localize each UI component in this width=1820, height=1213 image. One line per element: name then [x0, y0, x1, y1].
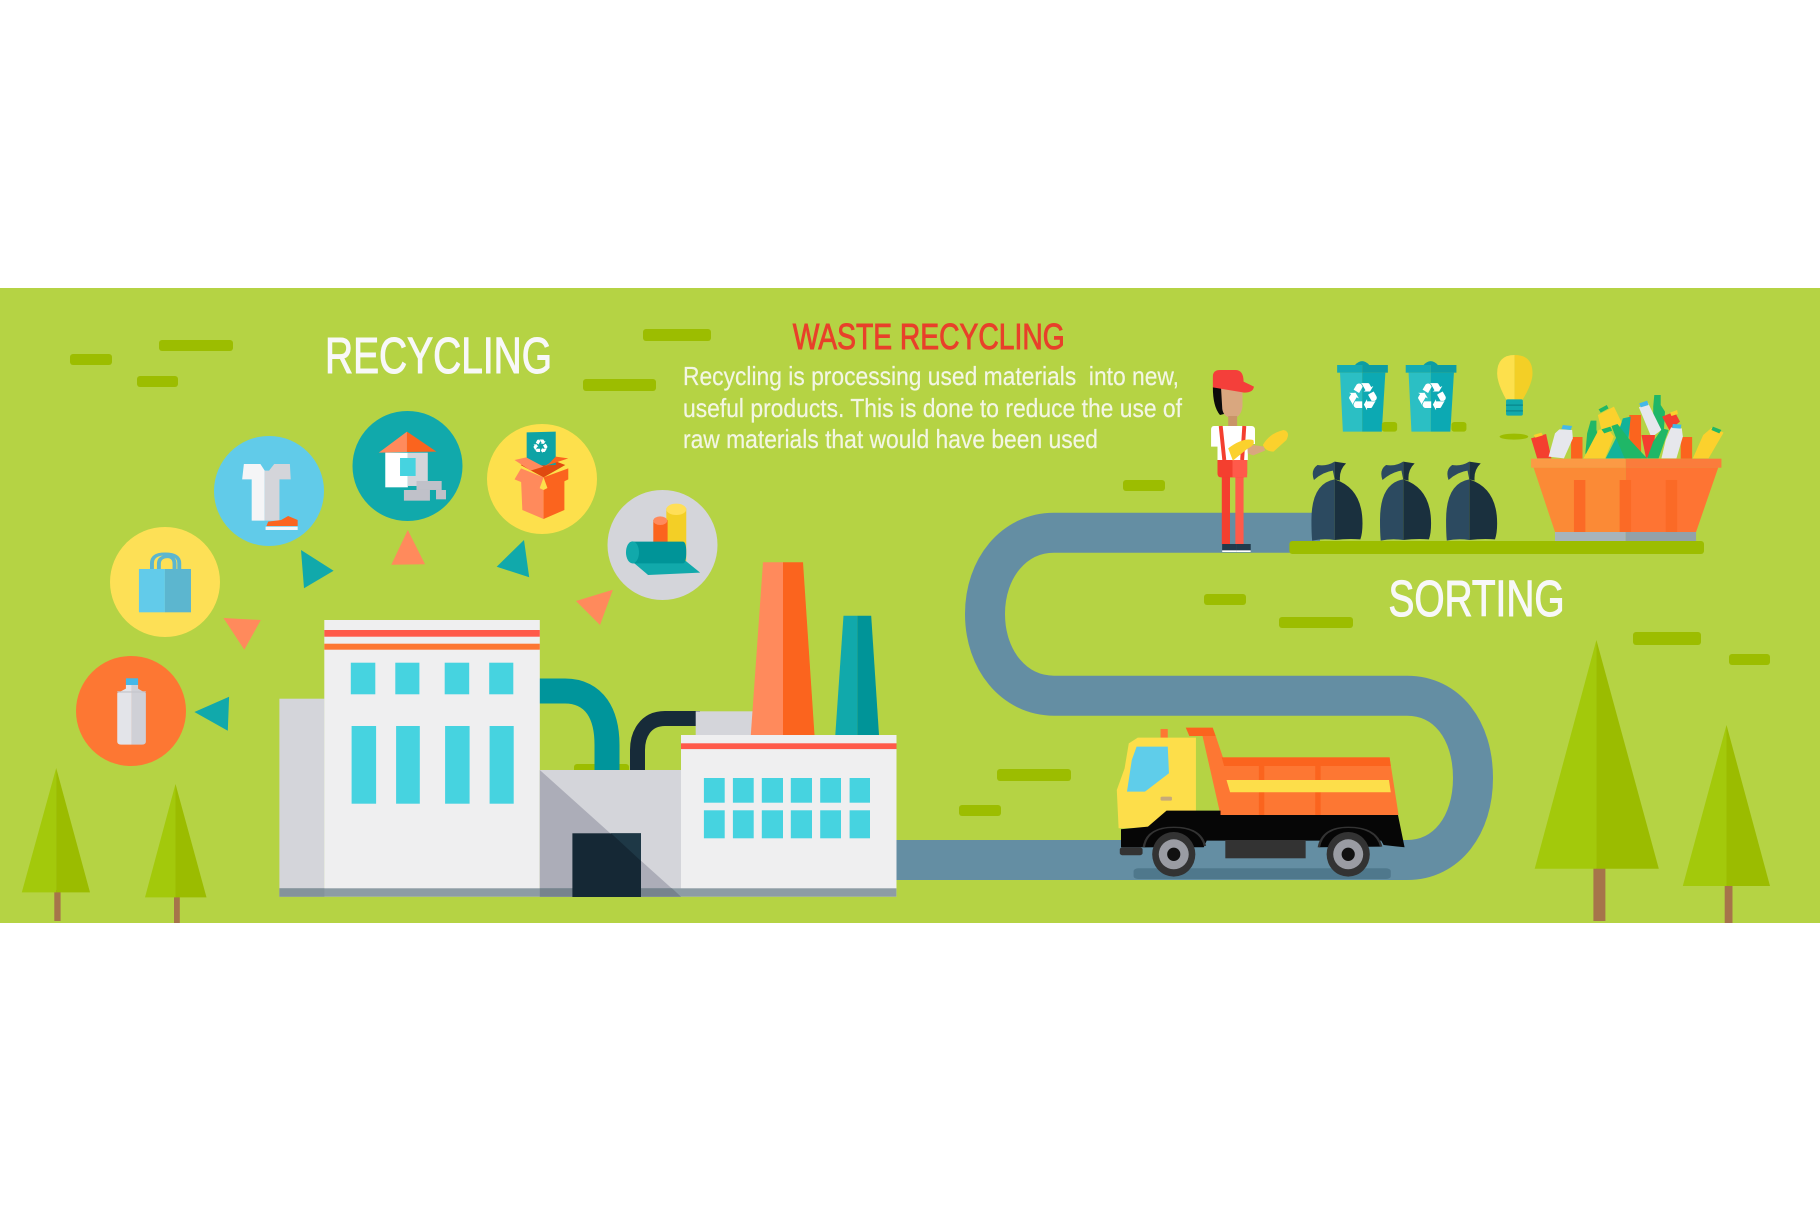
- worker: [1211, 370, 1288, 552]
- recycling bin 1: [1337, 361, 1397, 432]
- left annex: [279, 699, 324, 897]
- icon circle: clothes: [214, 436, 324, 546]
- icon circle: rolls: [608, 490, 718, 600]
- wheels: [1152, 832, 1370, 877]
- arrow to house: [391, 530, 425, 565]
- sorting area: [1211, 355, 1724, 554]
- tree 3: [1535, 640, 1659, 921]
- bag: [139, 554, 191, 612]
- box with recycling paper: [515, 432, 568, 519]
- tree 1: [22, 768, 90, 921]
- t-shirt and shoe: [242, 464, 298, 530]
- bin recycling symbol 2: ♻: [1415, 375, 1449, 419]
- description text: [683, 361, 1183, 454]
- dump body: [1186, 728, 1399, 815]
- heading: waste recycling: WASTE RECYCLING: [793, 316, 1065, 357]
- garbage bag 1: [1311, 462, 1362, 541]
- chassis: [1120, 811, 1405, 858]
- heading: sorting: SORTING: [1388, 570, 1564, 627]
- recycling bin 2: [1406, 361, 1466, 432]
- ground strip: [1289, 541, 1704, 554]
- arrow to bottle: [194, 697, 229, 731]
- arrow to box: [497, 540, 529, 577]
- arrow to rolls: [576, 590, 613, 625]
- product icons: [76, 411, 718, 766]
- trees: [22, 640, 1770, 923]
- house and bricks: [379, 432, 446, 501]
- icon circle: box: [487, 424, 597, 534]
- chimneys: [696, 562, 879, 735]
- dump truck: [1117, 728, 1405, 879]
- foundation strip: [279, 888, 896, 897]
- arrows: [194, 530, 613, 731]
- icon circle: house: [352, 411, 462, 521]
- cab: [1117, 729, 1196, 828]
- main building: [324, 620, 540, 897]
- truck shadow: [1134, 868, 1391, 879]
- green background band: [0, 288, 1820, 923]
- description text: Recycling is processing used materials into new,: [683, 361, 1179, 391]
- arrow to bag: [224, 618, 261, 650]
- bottles: [1531, 395, 1724, 459]
- heading: recycling: RECYCLING: [325, 327, 552, 384]
- tree 2: [145, 784, 206, 923]
- description text: useful products. This is done to reduce the use of: [683, 393, 1183, 423]
- orange container: [1531, 459, 1721, 541]
- road: [880, 533, 1473, 860]
- rolls: [626, 504, 700, 575]
- pipes: [535, 691, 700, 772]
- icon circle: bag: [110, 527, 220, 637]
- right building: [681, 735, 896, 897]
- garbage bag 3: [1446, 462, 1497, 541]
- icon circle: bottle: [76, 656, 186, 766]
- bottle: [117, 678, 146, 745]
- icon drawings: [117, 432, 700, 745]
- connecting hall and door: [540, 770, 681, 897]
- factory: [279, 562, 896, 897]
- description text: raw materials that would have been used: [683, 424, 1098, 454]
- garbage bag 2: [1380, 462, 1431, 541]
- bin recycling symbol 1: ♻: [1346, 375, 1380, 419]
- tree 4: [1683, 725, 1770, 923]
- arrow to clothes: [301, 550, 334, 588]
- recycling symbol on paper: ♻: [532, 436, 549, 458]
- light bulb: [1497, 355, 1532, 440]
